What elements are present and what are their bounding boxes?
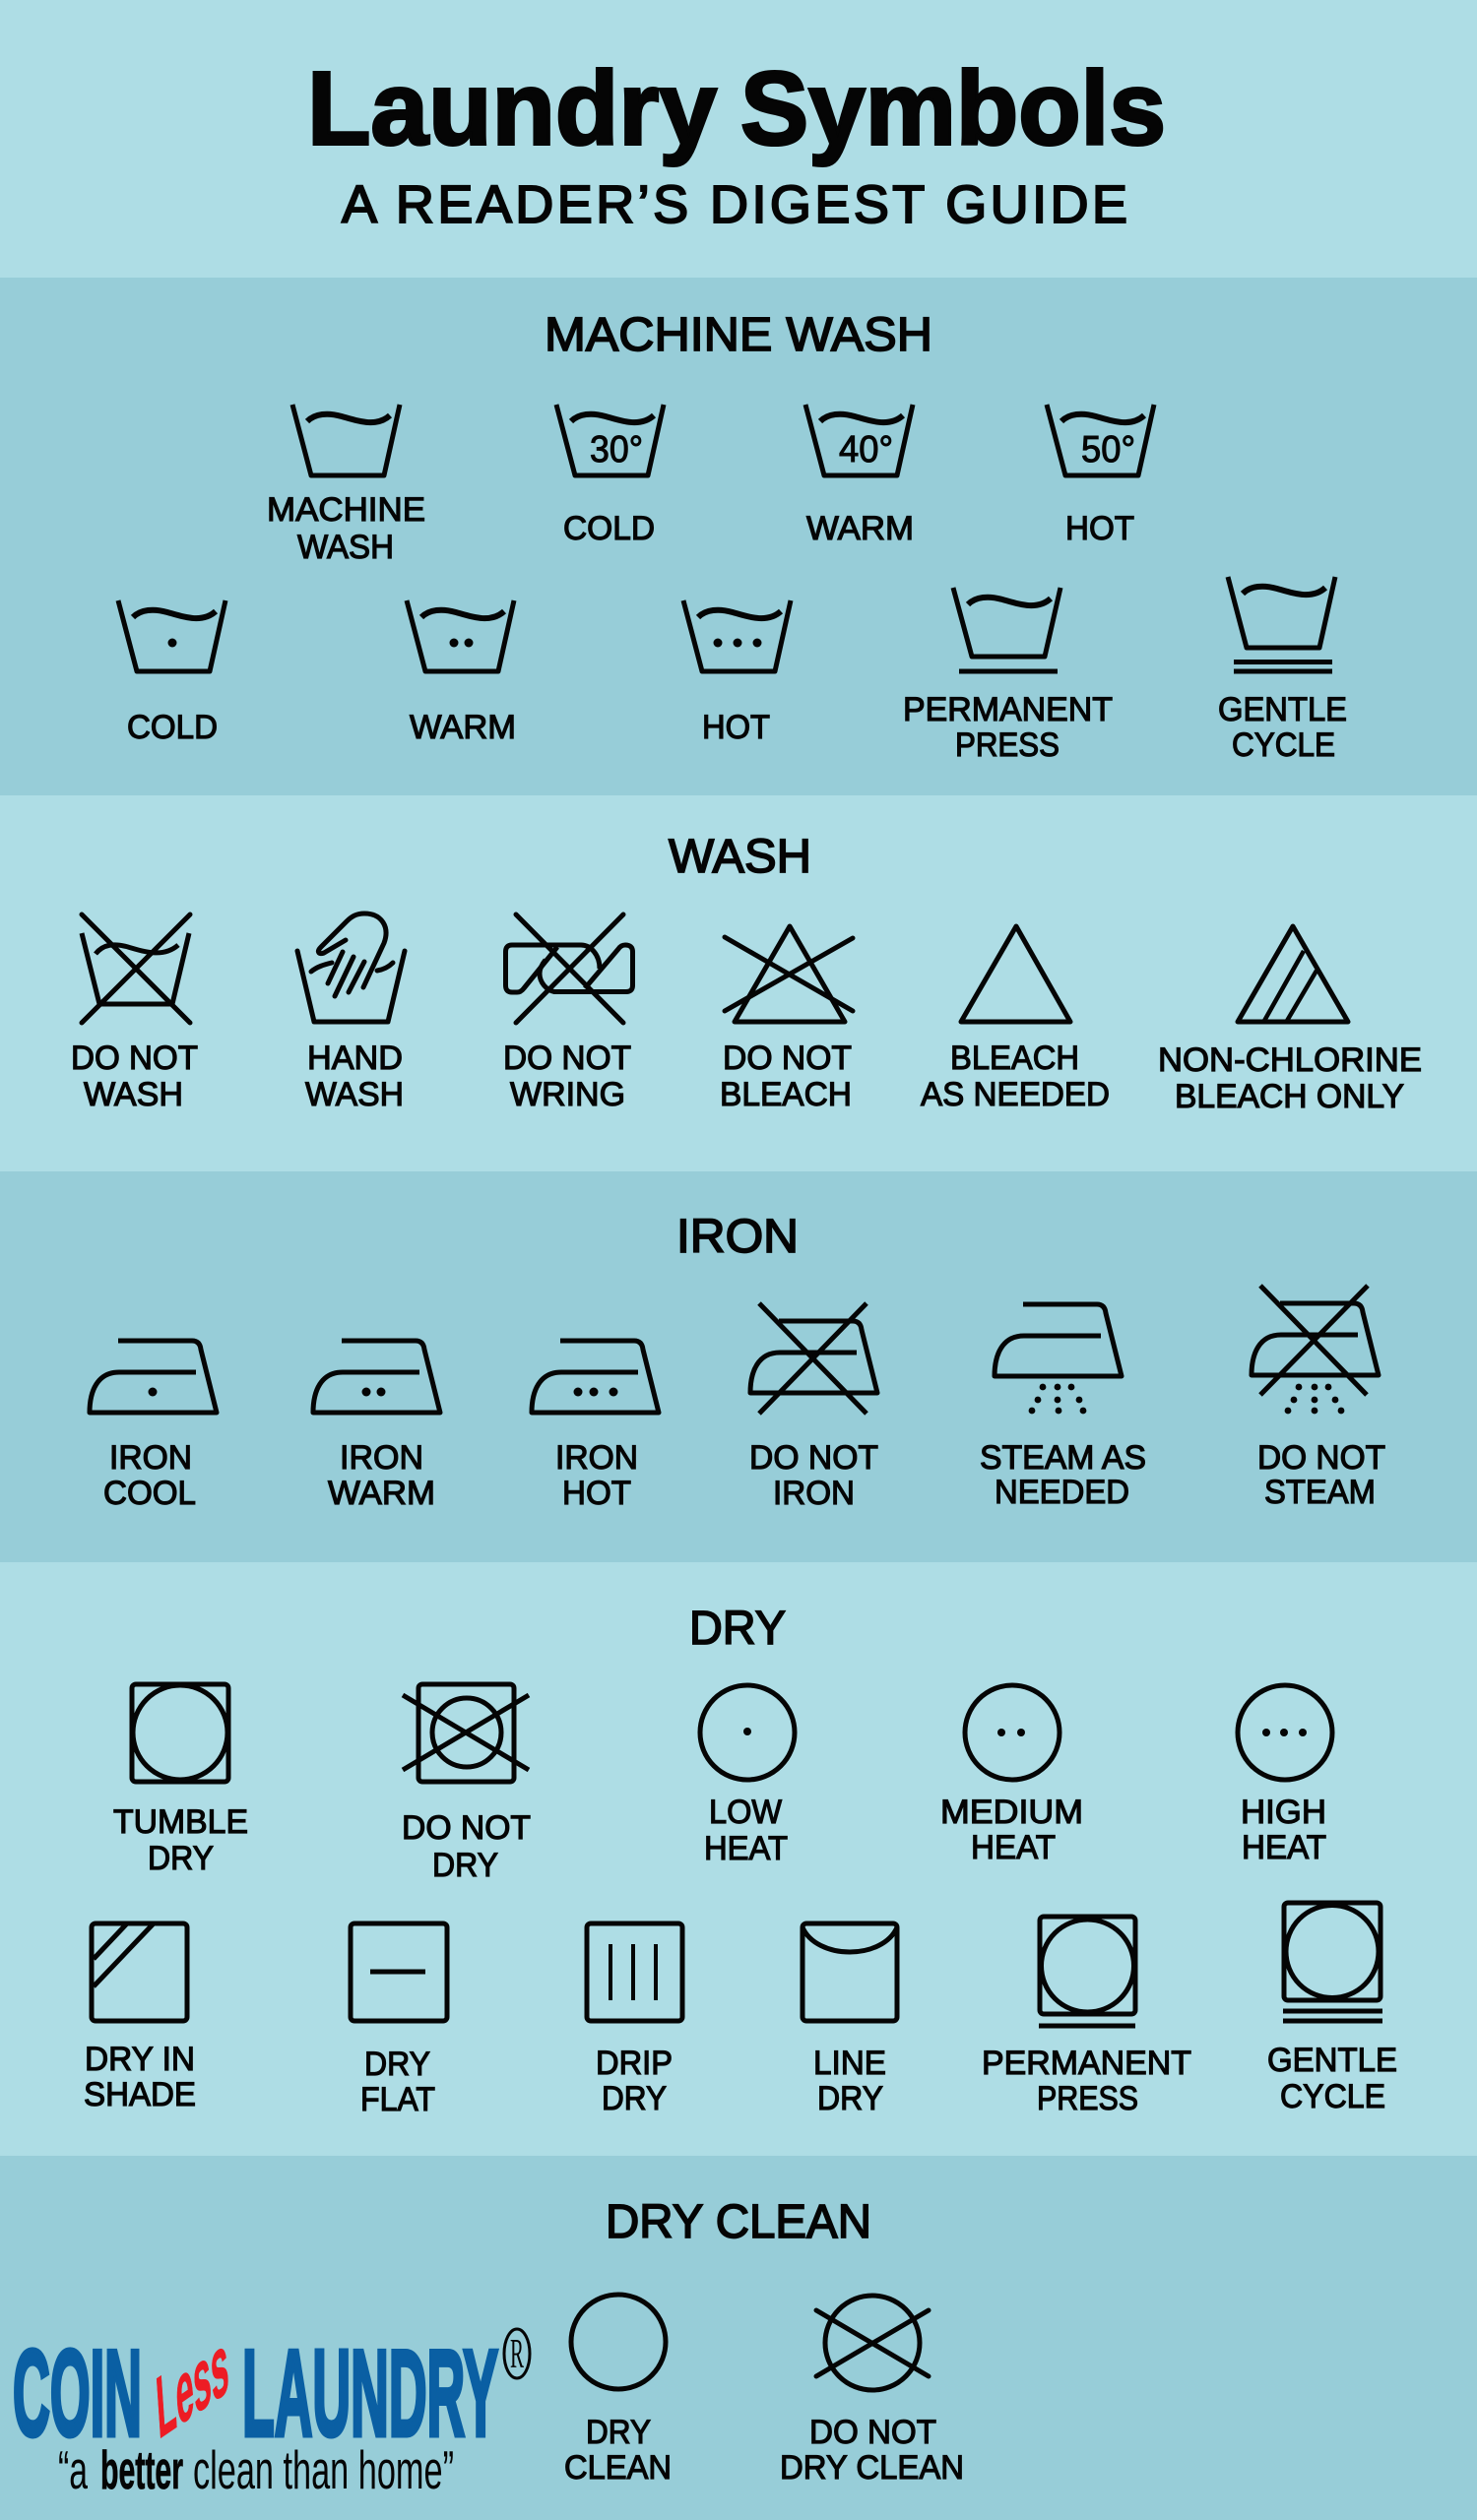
label: drip dry: DRY bbox=[602, 2080, 667, 2117]
item: do not bleach bbox=[720, 926, 853, 1113]
logo: coin less laundry bbox=[13, 2313, 530, 2500]
label: iron cool: IRON bbox=[109, 1439, 192, 1477]
icon: triangle bbox=[961, 926, 1070, 1022]
item: dry flat bbox=[351, 1923, 447, 2118]
label: iron hot: HOT bbox=[562, 1475, 631, 1512]
item: permanent press bbox=[903, 588, 1113, 764]
logo: coin less laundry: Less bbox=[154, 2313, 231, 2458]
label: do not dry bbox=[402, 1809, 531, 1884]
icon: crossed square with circle bbox=[403, 1684, 529, 1782]
item: bleach as needed bbox=[921, 926, 1110, 1113]
label: hand wash bbox=[305, 1040, 404, 1113]
label: do not wring: DO NOT bbox=[503, 1040, 631, 1077]
label: low heat: HEAT bbox=[704, 1830, 788, 1867]
item: steam as needed bbox=[980, 1304, 1146, 1511]
label: do not dry clean: DRY CLEAN bbox=[780, 2449, 964, 2487]
label: do not steam bbox=[1257, 1439, 1385, 1511]
label: do not steam: STEAM bbox=[1264, 1474, 1376, 1511]
subtitle: A READER’S DIGEST GUIDE bbox=[342, 175, 1127, 234]
label: do not wring: WRING bbox=[510, 1076, 625, 1113]
panel: iron bbox=[0, 1171, 1477, 1562]
icon: crossed iron bbox=[750, 1303, 877, 1414]
label: do not steam: DO NOT bbox=[1257, 1439, 1385, 1477]
label: cold: COLD bbox=[127, 709, 218, 746]
icon: tub 30 degrees: 30° bbox=[590, 429, 643, 471]
item: high heat bbox=[1238, 1685, 1332, 1866]
icon: tub 50 degrees: 50° bbox=[1081, 429, 1135, 471]
icon: tub with two bars bbox=[1228, 577, 1335, 671]
label: medium heat bbox=[940, 1794, 1083, 1866]
label: bleach as needed: AS NEEDED bbox=[921, 1076, 1110, 1113]
label: warm: WARM bbox=[410, 709, 516, 746]
logo tagline: “a bbox=[58, 2439, 88, 2500]
label: permanent press: PRESS bbox=[1037, 2080, 1138, 2117]
icon: tub three dots bbox=[683, 600, 791, 671]
item: medium heat bbox=[940, 1685, 1083, 1866]
heading: iron: IRON bbox=[676, 1211, 799, 1263]
label: do not dry clean: DO NOT bbox=[809, 2414, 936, 2451]
label: iron warm bbox=[328, 1439, 435, 1512]
item: machine wash bbox=[267, 405, 425, 566]
label: steam as needed: STEAM AS bbox=[980, 1439, 1146, 1477]
panel: header bbox=[0, 0, 1477, 278]
icon: crossed tub bbox=[82, 914, 190, 1023]
panel: dry clean: LAUNDRY bbox=[242, 2326, 498, 2462]
label: dry in shade: DRY IN bbox=[85, 2041, 195, 2078]
title: Symbols bbox=[740, 51, 1166, 167]
icon: iron two dots bbox=[313, 1341, 440, 1413]
item: permanent press dry bbox=[982, 1917, 1191, 2117]
label: do not bleach bbox=[720, 1040, 852, 1113]
icon: circle one dot bbox=[700, 1685, 795, 1780]
label: permanent press: PERMANENT bbox=[903, 691, 1113, 728]
item: line dry bbox=[803, 1923, 897, 2117]
label: low heat: LOW bbox=[709, 1794, 782, 1831]
item: drip dry bbox=[587, 1923, 682, 2117]
logo tagline: better bbox=[100, 2439, 183, 2500]
icon: circle two dots bbox=[965, 1685, 1060, 1780]
heading: dry clean: DRY CLEAN bbox=[606, 2196, 871, 2248]
label: machine wash: MACHINE bbox=[267, 491, 425, 529]
label: line dry: LINE bbox=[813, 2045, 886, 2082]
item: iron cool bbox=[90, 1341, 217, 1512]
item: iron warm bbox=[313, 1341, 440, 1512]
icon: square with dash bbox=[351, 1923, 447, 2021]
item: dry in shade bbox=[84, 1923, 196, 2113]
panel: machine wash bbox=[0, 278, 1477, 795]
label: machine wash bbox=[267, 491, 425, 566]
label: iron hot bbox=[555, 1439, 638, 1512]
item: dry clean bbox=[564, 2295, 672, 2487]
label: gentle cycle: GENTLE bbox=[1267, 2042, 1397, 2079]
label: machine wash: WASH bbox=[297, 529, 394, 566]
icon: circle bbox=[571, 2295, 666, 2389]
label: dry clean: DRY bbox=[586, 2414, 651, 2451]
logo registered mark bbox=[504, 2329, 530, 2378]
label: permanent press bbox=[982, 2045, 1191, 2117]
label: do not dry: DO NOT bbox=[402, 1809, 531, 1847]
icon: tub 50 degrees bbox=[1047, 405, 1154, 475]
label: high heat: HIGH bbox=[1241, 1794, 1326, 1831]
label: non-chlorine bleach only: BLEACH ONLY bbox=[1175, 1078, 1404, 1115]
label: high heat bbox=[1241, 1794, 1326, 1866]
label: drip dry bbox=[596, 2045, 673, 2117]
item: 50 degree hot bbox=[1047, 405, 1154, 547]
icon: striped triangle bbox=[1238, 926, 1348, 1022]
label: do not bleach: DO NOT bbox=[723, 1040, 852, 1077]
item: do not dry clean bbox=[780, 2296, 964, 2487]
icon: crossed triangle bbox=[725, 926, 853, 1022]
item: three dots hot bbox=[683, 600, 791, 746]
label: dry in shade bbox=[84, 2041, 196, 2113]
label: medium heat: HEAT bbox=[971, 1829, 1056, 1866]
item: 40 degree warm bbox=[805, 405, 914, 547]
item: do not wash bbox=[71, 914, 198, 1113]
label: gentle cycle: GENTLE bbox=[1218, 691, 1347, 728]
panel: dry bbox=[0, 1562, 1477, 2156]
label: dry clean bbox=[564, 2414, 672, 2487]
label: hot: HOT bbox=[1065, 510, 1134, 547]
label: dry in shade: SHADE bbox=[84, 2076, 196, 2113]
label: steam as needed bbox=[980, 1439, 1146, 1511]
label: line dry bbox=[813, 2045, 886, 2117]
icon: tub one dot bbox=[118, 600, 225, 671]
label: steam as needed: NEEDED bbox=[995, 1474, 1129, 1511]
label: iron cool: COOL bbox=[103, 1475, 196, 1512]
icon: tub 40 degrees: 40° bbox=[839, 429, 893, 471]
label: gentle cycle: CYCLE bbox=[1232, 726, 1335, 764]
icon: crossed iron with steam bbox=[1252, 1286, 1379, 1414]
label: hot: HOT bbox=[702, 709, 770, 746]
label: permanent press: PERMANENT bbox=[982, 2045, 1191, 2082]
icon: tumble with two bars bbox=[1283, 1903, 1382, 2021]
item: 30 degree cold bbox=[556, 405, 664, 547]
icon: tub 40 degrees bbox=[805, 405, 913, 475]
heading: dry: DRY bbox=[689, 1603, 786, 1655]
label: gentle cycle bbox=[1267, 2042, 1397, 2115]
label: iron warm: WARM bbox=[328, 1475, 435, 1512]
item: low heat bbox=[700, 1685, 795, 1867]
icon: circle three dots bbox=[1238, 1685, 1332, 1780]
icon: iron three dots bbox=[532, 1341, 659, 1413]
item: hand wash bbox=[297, 914, 405, 1113]
label: iron cool bbox=[103, 1439, 196, 1512]
label: iron hot: IRON bbox=[555, 1439, 638, 1477]
icon: square with diagonals bbox=[92, 1923, 187, 2021]
item: do not steam bbox=[1252, 1286, 1385, 1511]
heading: machine wash: MACHINE WASH bbox=[545, 309, 932, 361]
icon: tub two dots bbox=[407, 600, 514, 671]
icon: crossed wring bbox=[506, 914, 632, 1023]
label: tumble dry: TUMBLE bbox=[113, 1803, 248, 1841]
label: do not dry clean bbox=[780, 2414, 964, 2487]
label: medium heat: MEDIUM bbox=[940, 1794, 1083, 1831]
label: do not wash: DO NOT bbox=[71, 1040, 198, 1077]
label: do not wring bbox=[503, 1040, 631, 1113]
label: gentle cycle: CYCLE bbox=[1280, 2078, 1385, 2115]
item: one dot cold bbox=[118, 600, 225, 746]
label: tumble dry: DRY bbox=[148, 1840, 214, 1877]
item: non-chlorine bleach only bbox=[1158, 926, 1422, 1115]
label: bleach as needed bbox=[921, 1040, 1110, 1113]
label: high heat: HEAT bbox=[1242, 1829, 1326, 1866]
label: hand wash: HAND bbox=[307, 1040, 403, 1077]
label: tumble dry bbox=[113, 1803, 248, 1877]
label: dry clean: CLEAN bbox=[564, 2449, 672, 2487]
icon: crossed circle bbox=[816, 2296, 929, 2390]
label: non-chlorine bleach only bbox=[1158, 1041, 1422, 1115]
label: do not bleach: BLEACH bbox=[720, 1076, 852, 1113]
label: line dry: DRY bbox=[817, 2080, 883, 2117]
logo: coin less laundry: COIN bbox=[13, 2326, 142, 2462]
label: dry flat bbox=[360, 2046, 435, 2118]
label: dry flat: DRY bbox=[364, 2046, 430, 2083]
icon: iron with steam bbox=[995, 1304, 1122, 1414]
icon: square with circle bbox=[132, 1684, 228, 1782]
item: tumble dry bbox=[113, 1684, 248, 1877]
label: cold: COLD bbox=[563, 510, 655, 547]
item: gentle cycle dry bbox=[1267, 1903, 1397, 2115]
logo tagline: clean than home” bbox=[193, 2439, 454, 2500]
item: do not dry bbox=[402, 1684, 531, 1884]
label: do not iron bbox=[749, 1439, 878, 1512]
label: do not wash bbox=[71, 1040, 198, 1113]
label: non-chlorine bleach only: NON-CHLORINE bbox=[1158, 1041, 1422, 1079]
label: do not wash: WASH bbox=[84, 1076, 183, 1113]
label: bleach as needed: BLEACH bbox=[950, 1040, 1079, 1077]
label: permanent press: PRESS bbox=[955, 726, 1060, 764]
icon: square with three lines bbox=[587, 1923, 682, 2021]
item: do not wring bbox=[503, 914, 632, 1113]
item: iron hot bbox=[532, 1341, 659, 1512]
icon: tumble with one bar bbox=[1039, 1917, 1135, 2026]
label: do not iron: IRON bbox=[773, 1475, 855, 1512]
title: Laundry bbox=[307, 51, 717, 167]
item: two dots warm bbox=[407, 600, 516, 746]
label: permanent press bbox=[903, 691, 1113, 764]
label: iron warm: IRON bbox=[340, 1439, 423, 1477]
item: do not iron bbox=[749, 1303, 878, 1512]
panel: wash bbox=[0, 795, 1477, 1171]
label: gentle cycle bbox=[1218, 691, 1347, 764]
icon: tub 30 degrees bbox=[556, 405, 664, 475]
title bbox=[307, 51, 1166, 167]
item: gentle cycle bbox=[1218, 577, 1347, 764]
icon: wash tub bbox=[292, 405, 400, 475]
icon: square with curve bbox=[803, 1923, 897, 2021]
icon: iron one dot bbox=[90, 1341, 217, 1413]
label: hand wash: WASH bbox=[305, 1076, 404, 1113]
label: drip dry: DRIP bbox=[596, 2045, 673, 2082]
panel: dry clean bbox=[0, 2156, 1477, 2520]
logo tagline bbox=[58, 2439, 454, 2500]
icon: tub with one bar bbox=[953, 588, 1060, 671]
label: dry flat: FLAT bbox=[360, 2081, 435, 2118]
icon: hand in tub bbox=[297, 914, 405, 1022]
label: low heat bbox=[704, 1794, 788, 1867]
heading: wash: WASH bbox=[669, 831, 811, 883]
logo registered mark: R bbox=[510, 2332, 524, 2377]
label: do not iron: DO NOT bbox=[749, 1439, 878, 1477]
label: warm: WARM bbox=[806, 510, 914, 547]
label: do not dry: DRY bbox=[432, 1847, 498, 1884]
